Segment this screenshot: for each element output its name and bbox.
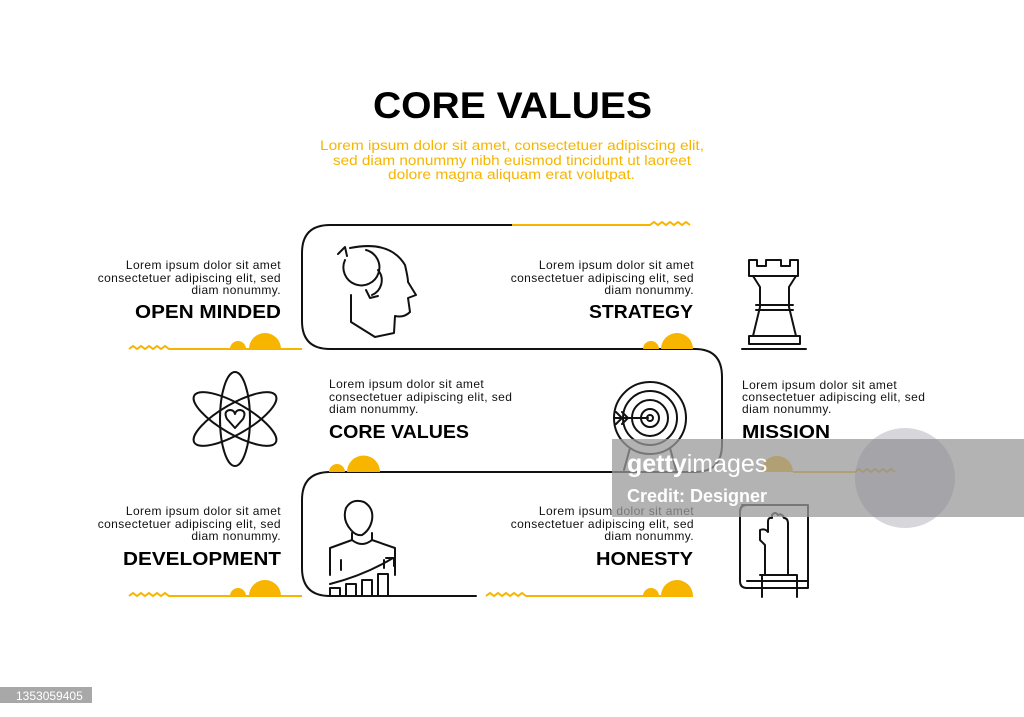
watermark band bbox=[612, 428, 1024, 528]
subtitle: Lorem ipsum dolor sit amet, consectetuer adipiscing elit, bbox=[320, 138, 704, 153]
panel: honesty: diam nonummy. bbox=[604, 529, 694, 543]
panel: open minded: OPEN MINDED bbox=[135, 301, 281, 322]
subtitle bbox=[320, 138, 704, 182]
watermark band: Credit: Designer bbox=[627, 486, 767, 506]
subtitle: sed diam nonummy nibh euismod tincidunt ut laoreet bbox=[333, 153, 691, 168]
panel: core values: consectetuer adipiscing elit, sed bbox=[329, 390, 512, 404]
panel: open minded bbox=[98, 258, 302, 349]
icon: atom heart bbox=[187, 372, 283, 466]
panel: development bbox=[98, 504, 302, 596]
panel: core values: CORE VALUES bbox=[329, 421, 469, 442]
icon: person growth bbox=[330, 501, 395, 596]
panel: core values: diam nonummy. bbox=[329, 402, 419, 416]
panel: honesty: consectetuer adipiscing elit, sed bbox=[511, 517, 694, 531]
panel: mission: consectetuer adipiscing elit, sed bbox=[742, 390, 925, 404]
panel: development: consectetuer adipiscing elit, sed bbox=[98, 517, 281, 531]
footer id: 1353059405 bbox=[16, 689, 83, 703]
footer id bbox=[0, 687, 92, 703]
panel: open minded: consectetuer adipiscing elit, sed bbox=[98, 271, 281, 285]
panel: core values: Lorem ipsum dolor sit amet bbox=[329, 377, 484, 391]
icon: hand on book bbox=[740, 505, 808, 597]
panel: honesty: Lorem ipsum dolor sit amet bbox=[539, 504, 694, 518]
panel: development: diam nonummy. bbox=[191, 529, 281, 543]
timeline path bbox=[302, 222, 722, 596]
icon: rook bbox=[742, 260, 806, 349]
panel: development: Lorem ipsum dolor sit amet bbox=[126, 504, 281, 518]
watermark band: gettyimages bbox=[627, 450, 767, 478]
panel: mission bbox=[742, 378, 925, 472]
panel: mission: MISSION bbox=[742, 421, 830, 442]
panel: strategy: Lorem ipsum dolor sit amet bbox=[539, 258, 694, 272]
title: CORE VALUES bbox=[373, 85, 652, 126]
icon: target bbox=[614, 382, 686, 470]
panel: strategy bbox=[511, 258, 694, 349]
panel: strategy: STRATEGY bbox=[589, 301, 694, 322]
icon: head with arrows bbox=[338, 246, 416, 337]
subtitle: dolore magna aliquam erat volutpat. bbox=[388, 167, 635, 182]
panel: mission: Lorem ipsum dolor sit amet bbox=[742, 378, 897, 392]
panel: open minded: Lorem ipsum dolor sit amet bbox=[126, 258, 281, 272]
panel: strategy: consectetuer adipiscing elit, sed bbox=[511, 271, 694, 285]
panel: open minded: diam nonummy. bbox=[191, 283, 281, 297]
panel: mission: diam nonummy. bbox=[742, 402, 832, 416]
panel: core values bbox=[329, 377, 512, 472]
panel: honesty bbox=[486, 504, 694, 596]
panel: strategy: diam nonummy. bbox=[604, 283, 694, 297]
panel: honesty: HONESTY bbox=[596, 548, 694, 569]
panel: development: DEVELOPMENT bbox=[123, 548, 282, 569]
